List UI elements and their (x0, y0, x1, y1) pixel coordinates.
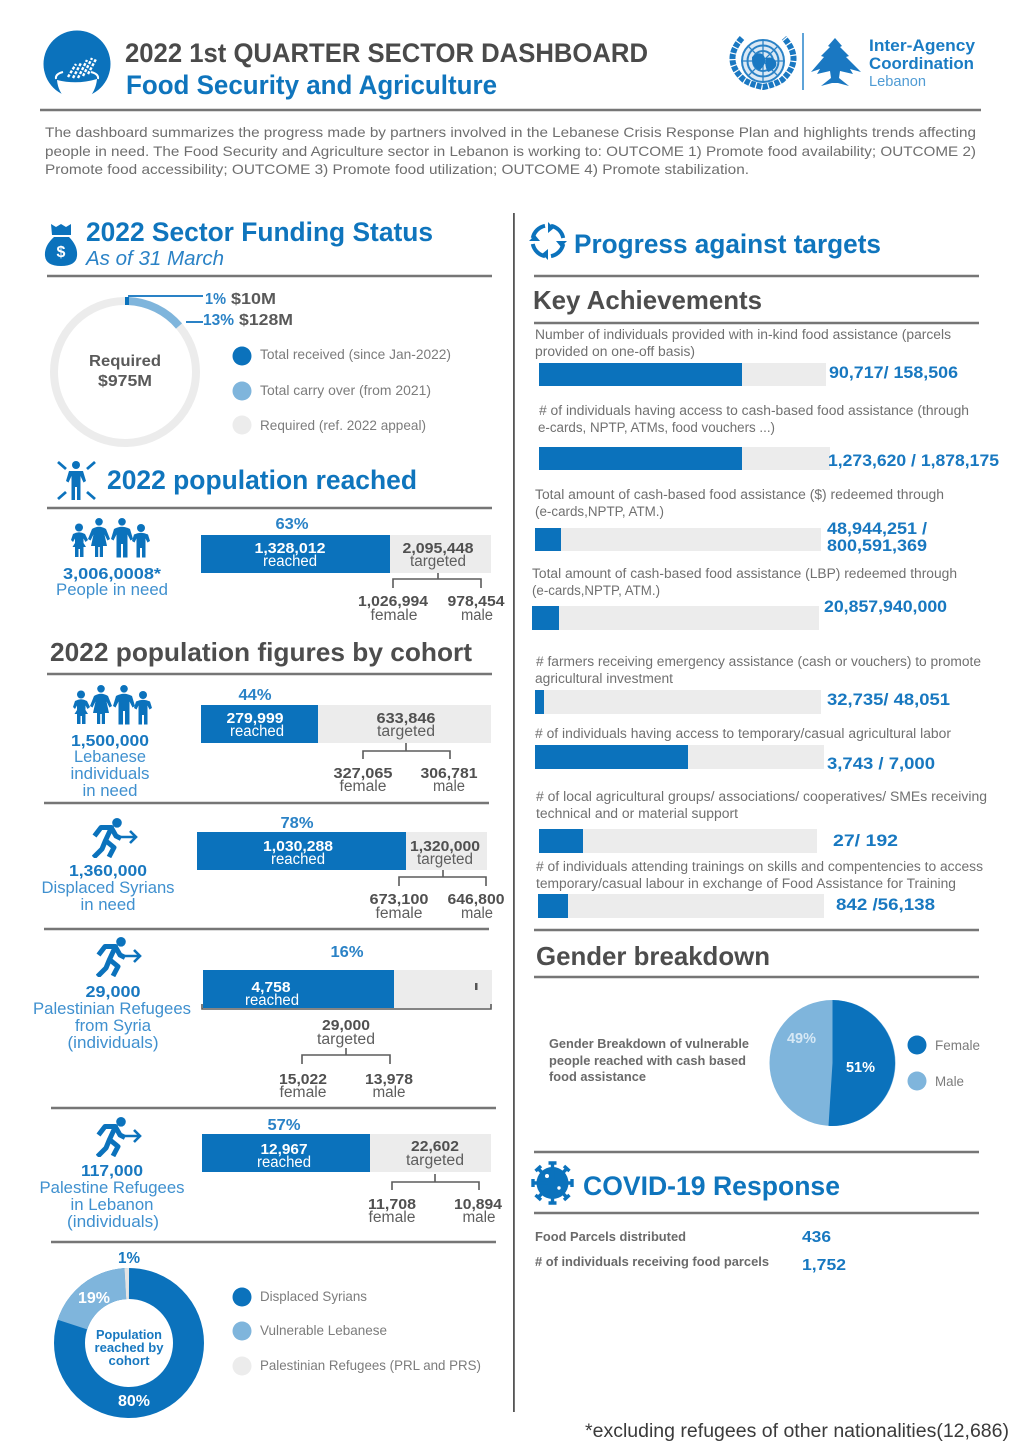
bar: PRS: 13,978 (365, 1072, 413, 1088)
bar: Lebanese: targeted (377, 723, 435, 740)
bar: Lebanese: 279,999 (226, 711, 284, 727)
PRL label: in Lebanon (70, 1195, 154, 1214)
donut centre label: Population (96, 1327, 162, 1342)
donut chart (70, 1283, 188, 1402)
donut percentages (78, 1250, 150, 1410)
gender pie chart: 51% (846, 1060, 875, 1076)
achievement: cash redeemed USD: Total amount of cash-based food assistance ($) redeemed through (535, 487, 944, 502)
bar: Lebanese: male (433, 778, 465, 795)
bar: PRL: 11,708 (368, 1197, 416, 1213)
gender pie chart (770, 1000, 896, 1126)
heading: figures by cohort: 2022 population figures by cohort (50, 637, 472, 667)
panel: population reached by cohort donut (70, 1250, 481, 1410)
bar: overall reached: 978,454 (448, 594, 504, 610)
bar: PRL: 10,894 (454, 1197, 502, 1213)
bar: PRL: 22,602 (411, 1139, 459, 1155)
bar: overall reached: reached (263, 553, 317, 570)
achievement: trainings: # of individuals attending trainings on skills and compentencies to access (536, 859, 983, 874)
funding callouts: $128M (239, 312, 293, 329)
cohort: Displaced Syrians (42, 815, 504, 922)
icon: runner (98, 1117, 140, 1156)
achievement: cash redeemed USD: 800,591,369 (827, 536, 927, 555)
PRS label: from Syria (75, 1016, 152, 1035)
PRL label (40, 1163, 184, 1231)
bar: Displaced Syrians: reached (271, 851, 325, 868)
bar: Displaced Syrians (197, 815, 504, 922)
achievement: cash-based access (538, 403, 999, 470)
panel: gender breakdown (534, 941, 980, 1126)
funding legend: Total carry over (from 2021) (260, 382, 431, 398)
icon: money bag: $ (57, 244, 66, 261)
bar: Displaced Syrians: 1,320,000 (410, 839, 480, 855)
Displaced Syrians label: Displaced Syrians (42, 878, 174, 897)
intro text: people in need. The Food Security and Agriculture sector in Lebanon is working to: OUTCOME 1) Promote food availability; OUTCOME 2) (45, 143, 976, 159)
bar: Displaced Syrians: 646,800 (448, 892, 504, 908)
donut centre label (94, 1327, 164, 1368)
footnote: *excluding refugees of other nationalities(12,686) (585, 1421, 1009, 1442)
bar: PRS: reached (245, 992, 299, 1009)
icon: family (71, 518, 150, 558)
achievement: cash-based access: 1,273,620 / 1,878,175 (828, 451, 999, 470)
cohort legend: Palestinian Refugees (PRL and PRS) (260, 1357, 481, 1373)
bar: Displaced Syrians: 1,030,288 (263, 839, 333, 855)
Displaced Syrians label: 1,360,000 (69, 863, 147, 880)
Displaced Syrians label: in need (80, 895, 136, 914)
donut centre label (89, 353, 161, 390)
achievement: trainings (536, 859, 983, 918)
logo: UN emblem (732, 38, 794, 87)
bar: PRS: female (280, 1084, 326, 1101)
subtitle: Food Security and Agriculture (126, 70, 497, 100)
achievement: agricultural labor (535, 726, 952, 773)
heading: funding: 2022 Sector Funding Status (86, 217, 433, 247)
icon: cycle arrows (529, 222, 567, 260)
people in need (56, 566, 168, 599)
people in need: People in need (56, 580, 168, 599)
panel: population reached (47, 461, 504, 624)
achievement: local groups (536, 789, 987, 853)
covid row: individuals: 1,752 (802, 1257, 846, 1274)
PRS label (33, 984, 191, 1052)
bar: Lebanese: 327,065 (334, 766, 392, 782)
cohort: Palestine Refugees in Lebanon (40, 1117, 502, 1231)
donut percentages: 80% (118, 1393, 150, 1410)
achievement: cash redeemed LBP: 20,857,940,000 (824, 597, 947, 616)
icon: money bag (45, 224, 77, 266)
achievement: farmers: agricultural investment (535, 671, 673, 686)
gender description: Gender Breakdown of vulnerable (549, 1036, 749, 1051)
funding callouts: 1% (205, 291, 226, 308)
title: 2022 1st QUARTER SECTOR DASHBOARD (125, 38, 648, 68)
bar: Lebanese: reached (230, 723, 284, 740)
PRL label: Palestine Refugees (40, 1178, 184, 1197)
logo: agency name: Inter-Agency (869, 36, 976, 55)
logo: agency name: Lebanon (869, 73, 926, 90)
achievement: in-kind food assistance: provided on one-off basis) (535, 344, 695, 359)
achievement: cash-based access: e-cards, NPTP, ATMs, food vouchers ...) (538, 420, 775, 435)
bar: PRL: female (368, 1209, 416, 1226)
achievement: agricultural labor: # of individuals having access to temporary/casual agricultural labor (535, 726, 952, 741)
funding legend: Required (ref. 2022 appeal) (260, 417, 426, 433)
bar: PRS: targeted (317, 1031, 375, 1048)
funding callouts: $10M (231, 291, 276, 308)
bar: Displaced Syrians: 78% (280, 815, 314, 832)
donut centre label: cohort (108, 1353, 150, 1368)
achievement: in-kind food assistance: 90,717/ 158,506 (829, 363, 958, 382)
achievement: cash redeemed LBP: Total amount of cash-based food assistance (LBP) redeemed through (532, 566, 957, 581)
funding legend: Total received (since Jan-2022) (260, 346, 451, 362)
bar: PRL (202, 1117, 502, 1226)
achievement: local groups: # of local agricultural groups/ associations/ cooperatives/ SMEs receiving (536, 789, 987, 804)
donut percentages: 19% (78, 1290, 110, 1307)
heading: population reached: 2022 population reached (107, 465, 417, 495)
icon: person with rays (58, 461, 95, 500)
bar: PRS: 15,022 (279, 1072, 327, 1088)
gender legend: Male (935, 1073, 964, 1089)
bar: Lebanese: 44% (238, 687, 272, 704)
bar: Lebanese: 633,846 (376, 711, 436, 727)
bar: overall reached: female (370, 607, 418, 624)
achievement: farmers: 32,735/ 48,051 (827, 690, 950, 709)
people in need: 3,006,0008* (63, 566, 162, 583)
gender description: food assistance (549, 1069, 646, 1084)
icon: virus (533, 1163, 572, 1203)
bar: PRL: 57% (268, 1117, 301, 1134)
bar: Displaced Syrians: female (376, 905, 422, 922)
gender pie chart: 49% (787, 1031, 816, 1047)
icon: runner (94, 818, 136, 858)
bar: Lebanese: 306,781 (420, 766, 478, 782)
bar: Displaced Syrians: male (461, 905, 493, 922)
subheading: date: As of 31 March (85, 248, 224, 270)
bar: PRS: 4,758 (252, 980, 290, 996)
donut centre label: reached by (94, 1340, 164, 1355)
bar: PRL: 12,967 (260, 1142, 308, 1158)
donut centre label: Required (89, 353, 161, 370)
bar: PRS: male (372, 1084, 406, 1101)
Displaced Syrians label (42, 863, 174, 914)
bar: PRS: 16% (330, 944, 364, 961)
funding callouts: 13% (203, 312, 234, 329)
covid row: parcels: 436 (802, 1229, 831, 1246)
Lebanese label: Lebanese (74, 747, 146, 766)
Lebanese label: individuals (70, 764, 150, 783)
achievement: local groups: technical and or material support (536, 806, 738, 821)
achievement: trainings: 842 /56,138 (836, 895, 935, 914)
donut percentages: 1% (118, 1250, 140, 1267)
bar: overall reached: 2,095,448 (402, 541, 474, 557)
cohort legend: Vulnerable Lebanese (260, 1322, 387, 1338)
cohort: Palestinian Refugees from Syria (33, 937, 492, 1101)
gender legend: Female (935, 1037, 980, 1053)
logo: agency name: Coordination (869, 54, 974, 73)
heading: progress: Progress against targets (574, 229, 881, 259)
achievement: cash redeemed USD: 48,944,251 / (827, 519, 927, 538)
PRS label: (individuals) (68, 1033, 158, 1052)
achievement: in-kind food assistance (535, 327, 958, 386)
bar: Displaced Syrians: targeted (417, 851, 473, 868)
logo divider (802, 33, 804, 90)
achievement: cash redeemed USD (535, 487, 944, 555)
gender description: people reached with cash based (549, 1053, 746, 1068)
bar: Lebanese (201, 687, 491, 795)
achievement: cash redeemed USD: (e-cards,NPTP, ATM.) (535, 504, 664, 519)
achievement: cash-based access: # of individuals having access to cash-based food assistance (through (539, 403, 969, 418)
achievement: farmers (535, 654, 981, 714)
panel: progress against targets (529, 222, 999, 918)
covid row: individuals: # of individuals receiving food parcels (535, 1254, 769, 1269)
intro text: The dashboard summarizes the progress made by partners involved in the Lebanese Crisis Response Plan and highlights trends affecting (45, 124, 976, 140)
bar: PRL: reached (257, 1154, 311, 1171)
logo: agency name (869, 36, 976, 90)
header: food security icon (44, 30, 110, 100)
Lebanese label: 1,500,000 (71, 733, 149, 750)
bar: overall reached: male (461, 607, 493, 624)
funding legend (232, 346, 451, 434)
achievement: in-kind food assistance: Number of individuals provided with in-kind food assistance (parcels (535, 327, 951, 342)
heading: covid: COVID-19 Response (583, 1171, 840, 1201)
achievement: cash redeemed LBP: (e-cards,NPTP, ATM.) (532, 583, 660, 598)
gender legend (908, 1036, 980, 1090)
logo: cedar tree (811, 38, 861, 86)
bar: Displaced Syrians: 673,100 (370, 892, 428, 908)
bar: PRL: targeted (406, 1152, 464, 1169)
heading: gender: Gender breakdown (536, 941, 770, 971)
cohort legend: Displaced Syrians (260, 1288, 367, 1304)
bar: overall reached: 1,026,994 (358, 594, 428, 610)
cohort legend (232, 1288, 481, 1376)
bar: PRS (202, 944, 492, 1101)
bar: overall reached (201, 516, 504, 624)
achievement: local groups: 27/ 192 (833, 831, 898, 850)
achievement: farmers: # farmers receiving emergency assistance (cash or vouchers) to promote (536, 654, 981, 669)
covid row: individuals (535, 1254, 846, 1274)
donut centre label: $975M (98, 373, 152, 390)
column divider (513, 213, 515, 1412)
intro text (45, 124, 976, 177)
PRS label: 29,000 (86, 984, 141, 1001)
icon: runner (98, 937, 140, 976)
icon: family (73, 685, 152, 724)
bar: overall reached: 1,328,012 (254, 541, 326, 557)
bar: overall reached: 63% (276, 516, 309, 533)
gender description (549, 1036, 749, 1084)
achievement: agricultural labor: 3,743 / 7,000 (827, 754, 935, 773)
bar: Lebanese: female (340, 778, 386, 795)
PRS label: Palestinian Refugees (33, 999, 191, 1018)
achievement: trainings: temporary/casual labour in exchange of Food Assistance for Training (536, 876, 956, 891)
PRL label: 117,000 (81, 1163, 143, 1180)
PRL label: (individuals) (67, 1212, 159, 1231)
bar: PRL: male (462, 1209, 496, 1226)
achievement: cash redeemed LBP (532, 566, 957, 630)
panel: funding status (45, 217, 492, 443)
Lebanese label (70, 733, 150, 800)
funding donut (54, 296, 203, 443)
funding callouts (203, 291, 293, 329)
cohort: Lebanese (70, 685, 491, 800)
bar: PRS: 29,000 (322, 1018, 370, 1034)
covid row: parcels (535, 1229, 831, 1246)
covid row: parcels: Food Parcels distributed (535, 1229, 686, 1244)
intro text: Promote food accessibility; OUTCOME 3) Promote food utilization; OUTCOME 4) Promote stabilization. (45, 161, 749, 177)
bar: overall reached: targeted (410, 553, 466, 570)
panel: COVID-19 response (533, 1163, 979, 1274)
Lebanese label: in need (82, 781, 138, 800)
heading: key achievements: Key Achievements (533, 285, 762, 315)
